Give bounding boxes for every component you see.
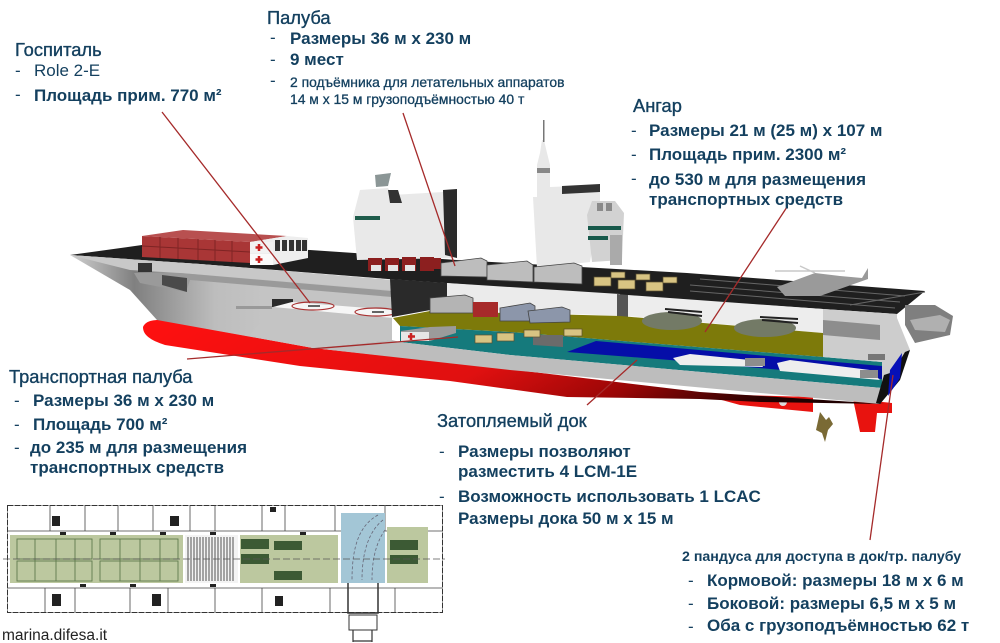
flooded dock [567, 341, 893, 380]
floor plan [3, 505, 445, 642]
ship [70, 120, 953, 442]
forward island [353, 173, 457, 260]
leader lines [162, 112, 893, 540]
text: flight deck: - [270, 50, 276, 69]
aft island and mast [533, 120, 624, 268]
red lower hull [143, 320, 885, 404]
text: flooded dock: Возможность использовать 1 LCAC [458, 487, 761, 506]
text: flooded dock: - [439, 442, 445, 461]
plan grating [185, 535, 238, 583]
rudder and aft underwater hull [700, 394, 892, 442]
plan machinery blocks [52, 507, 306, 606]
plan compartments [7, 505, 442, 612]
text: ramps [682, 549, 969, 636]
plan ramp [348, 583, 378, 642]
text: ramps: Оба с грузоподъёмностью 62 т [707, 616, 969, 635]
text: flooded dock: Размеры позволяют [458, 442, 631, 461]
red vehicles in hangar [473, 302, 498, 317]
deck containers [441, 258, 582, 284]
text: hangar: Ангар [633, 95, 682, 116]
lower vehicle deck teal floor [400, 326, 882, 388]
red vehicles on deck [368, 257, 441, 271]
deck vehicles [594, 272, 677, 291]
side wall of cutaway [313, 340, 882, 404]
text: hangar: - [631, 169, 637, 188]
text: hospital: - [15, 85, 21, 104]
medical containers on deck [142, 230, 308, 265]
hangar olive floor [393, 311, 823, 357]
text: vehicle deck: Размеры 36 м x 230 м [33, 391, 214, 410]
helicopter on deck [775, 266, 868, 296]
text: hospital: Госпиталь [15, 39, 102, 60]
text: vehicle deck: - [14, 415, 20, 434]
medical containers on lower deck [401, 326, 456, 341]
text: ramps: 2 пандуса для доступа в док/тр. палубу [682, 549, 961, 565]
text: flight deck: - [270, 28, 276, 47]
text: flooded dock: - [439, 487, 445, 506]
text: flooded dock: Затопляемый док [437, 410, 587, 431]
plan centre line [3, 558, 445, 560]
text: hospital [15, 39, 222, 105]
plan vehicle stalls [17, 539, 178, 581]
text: hangar: Площадь прим. 2300 м² [649, 145, 846, 164]
hangar helicopters [642, 309, 798, 337]
text: ramps: Кормовой: размеры 18 м x 6 м [707, 571, 964, 590]
text: vehicle deck: - [14, 391, 20, 410]
helipad on forward deck [273, 302, 397, 318]
text: hospital: Role 2-E [34, 61, 100, 80]
plan dock [341, 513, 385, 583]
text: ramps: - [688, 571, 694, 590]
plan outline [8, 506, 442, 612]
text: vehicle deck: до 235 м для размещения [30, 438, 247, 457]
text: vehicle deck: Транспортная палуба [9, 366, 192, 387]
lower deck elevator area [533, 335, 563, 347]
text: flight deck: Палуба [267, 7, 331, 28]
bow hull side [70, 255, 392, 348]
text: flooded dock: разместить 4 LCM-1E [458, 462, 637, 481]
text: flight deck [267, 7, 564, 108]
hangar containers [430, 295, 570, 323]
vehicles on lower deck [475, 329, 582, 343]
text: flight deck: Размеры 36 м x 230 м [290, 29, 471, 48]
text: flooded dock: Размеры дока 50 м x 15 м [458, 509, 674, 528]
text: flight deck: 9 мест [290, 50, 344, 69]
text: ramps: - [688, 617, 694, 636]
text: vehicle deck: Площадь 700 м² [33, 415, 167, 434]
flight deck [70, 245, 925, 314]
text: ramps: - [688, 594, 694, 613]
text: ramps: Боковой: размеры 6,5 м x 5 м [707, 594, 956, 613]
text: hangar: - [631, 145, 637, 164]
plan landing craft [241, 539, 418, 580]
text: flight deck: - [270, 71, 276, 90]
text: hangar: транспортных средств [649, 190, 843, 209]
text: flooded dock [437, 410, 761, 528]
hangar back wall [390, 279, 823, 333]
text: flight deck: 2 подъёмника для летательных аппаратов [290, 74, 564, 90]
stern section [823, 305, 953, 404]
text: vehicle deck [9, 366, 247, 477]
text: vehicle deck: транспортных средств [30, 458, 224, 477]
deck markings [690, 279, 925, 308]
text: hospital: - [15, 61, 21, 80]
text: flight deck: 14 м x 15 м грузоподъёмностью 40 т [290, 91, 524, 107]
text: hangar: - [631, 121, 637, 140]
text: vehicle deck: - [14, 438, 20, 457]
text: hangar: Размеры 21 м (25 м) x 107 м [649, 121, 882, 140]
text: hospital: Площадь прим. 770 м² [34, 86, 222, 105]
plan green areas [10, 527, 428, 583]
text: hangar: до 530 м для размещения [649, 170, 866, 189]
text: hangar [631, 95, 882, 209]
